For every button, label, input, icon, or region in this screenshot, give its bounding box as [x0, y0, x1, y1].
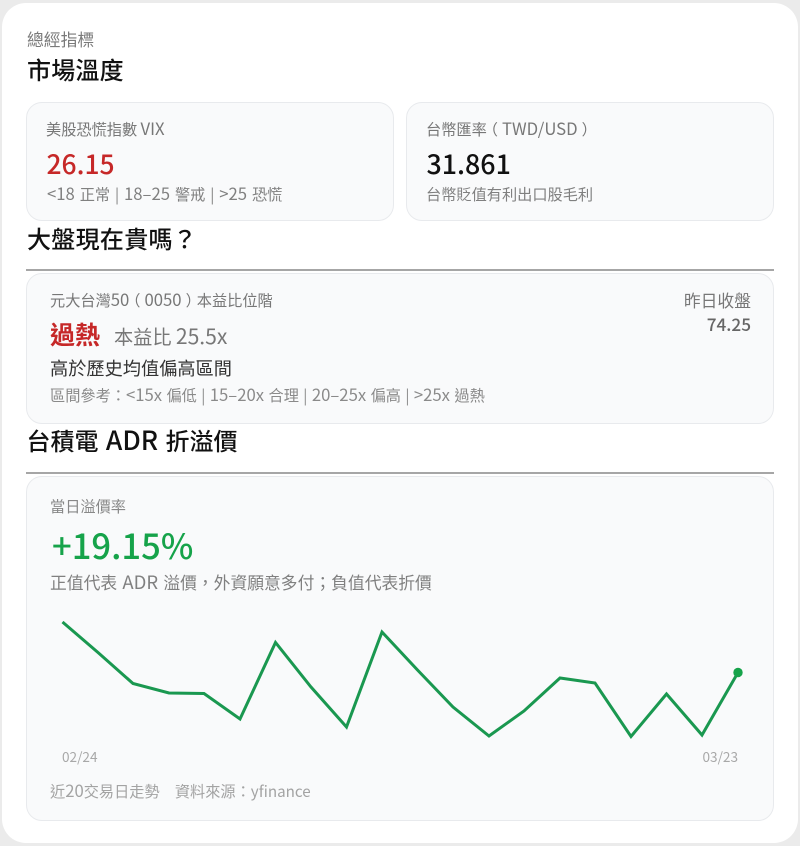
panel: 0050 valuation: [26, 273, 774, 424]
heading: TSMC ADR premium: 台積電 ADR 折溢價: [26, 419, 238, 458]
heading: is the market expensive: 大盤現在貴嗎？: [27, 220, 197, 255]
last point marker: [733, 668, 743, 677]
valuation description: 高於歷史均值偏高區間: [50, 355, 232, 381]
valuation label: 元大台灣50（0050 ）本益比位階: [50, 287, 273, 311]
trend line: [62, 622, 738, 736]
exchange rate note: 台幣貶值有利出口股毛利: [426, 183, 593, 205]
premium label: 當日溢價率: [50, 495, 126, 517]
previous close label: 昨日收盤: [684, 288, 751, 312]
panel: VIX: [26, 102, 394, 221]
premium note: 正值代表 ADR 溢價，外資願意多付；負值代表折價: [50, 569, 432, 595]
VIX label: 美股恐慌指數 VIX: [46, 116, 165, 140]
valuation ranges: 區間參考：<15x 偏低 | 15–20x 合理 | 20–25x 偏高 | >25x 過熱: [50, 382, 485, 406]
chart footer: 近20交易日走勢 資料來源：yfinance: [50, 778, 311, 802]
previous close value: 74.25: [707, 311, 751, 336]
panel: TWD/USD: [406, 102, 774, 221]
eyebrow label: 總經指標: [27, 27, 94, 51]
premium value: +19.15%: [52, 519, 193, 569]
end date label: 03/23: [702, 746, 738, 766]
valuation status: 過熱: [50, 316, 100, 352]
start date label: 02/24: [62, 746, 98, 766]
panel: ADR premium: [26, 476, 774, 821]
heading: market temperature: 市場溫度: [27, 51, 124, 86]
exchange rate label: 台幣匯率（TWD/USD ）: [426, 116, 597, 140]
line chart: premium trend: [62, 620, 743, 766]
VIX ranges: <18 正常 | 18–25 警戒 | >25 恐慌: [47, 181, 282, 205]
PE ratio: 本益比 25.5x: [114, 321, 227, 351]
VIX value: 26.15: [46, 142, 115, 182]
exchange rate value: 31.861: [426, 142, 511, 182]
